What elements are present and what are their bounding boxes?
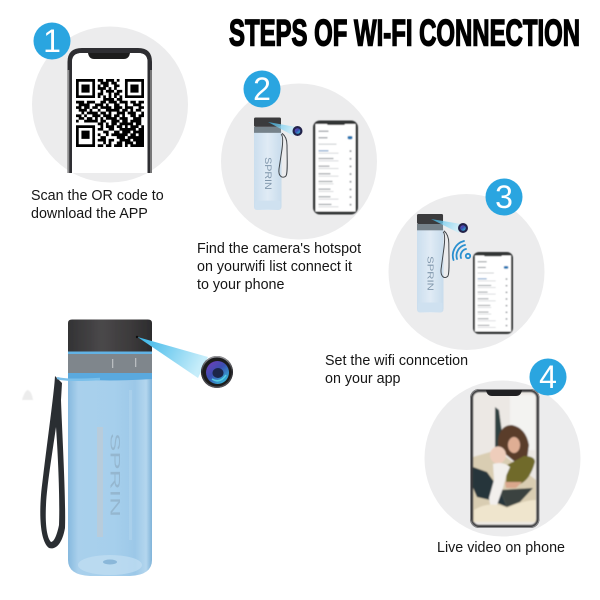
panel: step 4 live video [424, 358, 580, 556]
phone with family photo [470, 389, 540, 528]
step 3 number badge: 3 [495, 179, 513, 215]
phone with wifi list [473, 252, 513, 334]
panel: step 1 scan QR code [31, 22, 188, 222]
small bottle with camera [254, 118, 302, 210]
panel: step 3 set wifi connection [325, 178, 544, 387]
family photo [473, 392, 536, 525]
grey marking strip [97, 427, 103, 537]
bottle grey band [68, 353, 152, 373]
bottle strap [40, 376, 65, 548]
panel: step 2 find hotspot [197, 70, 377, 293]
QR code [76, 80, 144, 146]
small bottle with camera [417, 214, 468, 312]
phone with QR code [68, 48, 152, 173]
step 2 number badge [244, 70, 280, 108]
step 4 caption: Live video on phone [437, 540, 565, 556]
step 1 caption: download the APP [31, 206, 148, 222]
step 1 circle background [32, 26, 188, 182]
camera lens [201, 356, 233, 388]
step 3 circle background [388, 194, 544, 350]
step 1 number badge: 1 [43, 23, 61, 59]
step 2 number badge: 2 [253, 71, 271, 107]
step 1 caption: Scan the OR code to [31, 188, 164, 204]
step 3 caption: on your app [325, 371, 401, 387]
step 2 caption: Find the camera's hotspot [197, 241, 361, 257]
step 3 caption: Set the wifi conncetion [325, 353, 468, 369]
bottle brand text: SPRIN [108, 433, 124, 517]
bottle neck ring and strap tab [68, 373, 152, 380]
camera view beam [138, 337, 208, 378]
step 4 circle background [424, 380, 580, 536]
step 2 caption: to your phone [197, 277, 284, 293]
step 4 number badge: 4 [539, 359, 557, 395]
step 4 number badge [530, 358, 566, 396]
main water bottle with hidden camera [40, 320, 233, 576]
bottle cap [68, 320, 152, 352]
bottle body [68, 378, 152, 576]
step 2 caption: on yourwifi list connect it [197, 259, 352, 275]
step 1 number badge [34, 22, 70, 60]
step 3 number badge [486, 178, 522, 216]
phone with wifi list [313, 120, 358, 214]
icon: wifi signal [453, 241, 470, 260]
step 2 circle background [221, 84, 377, 240]
